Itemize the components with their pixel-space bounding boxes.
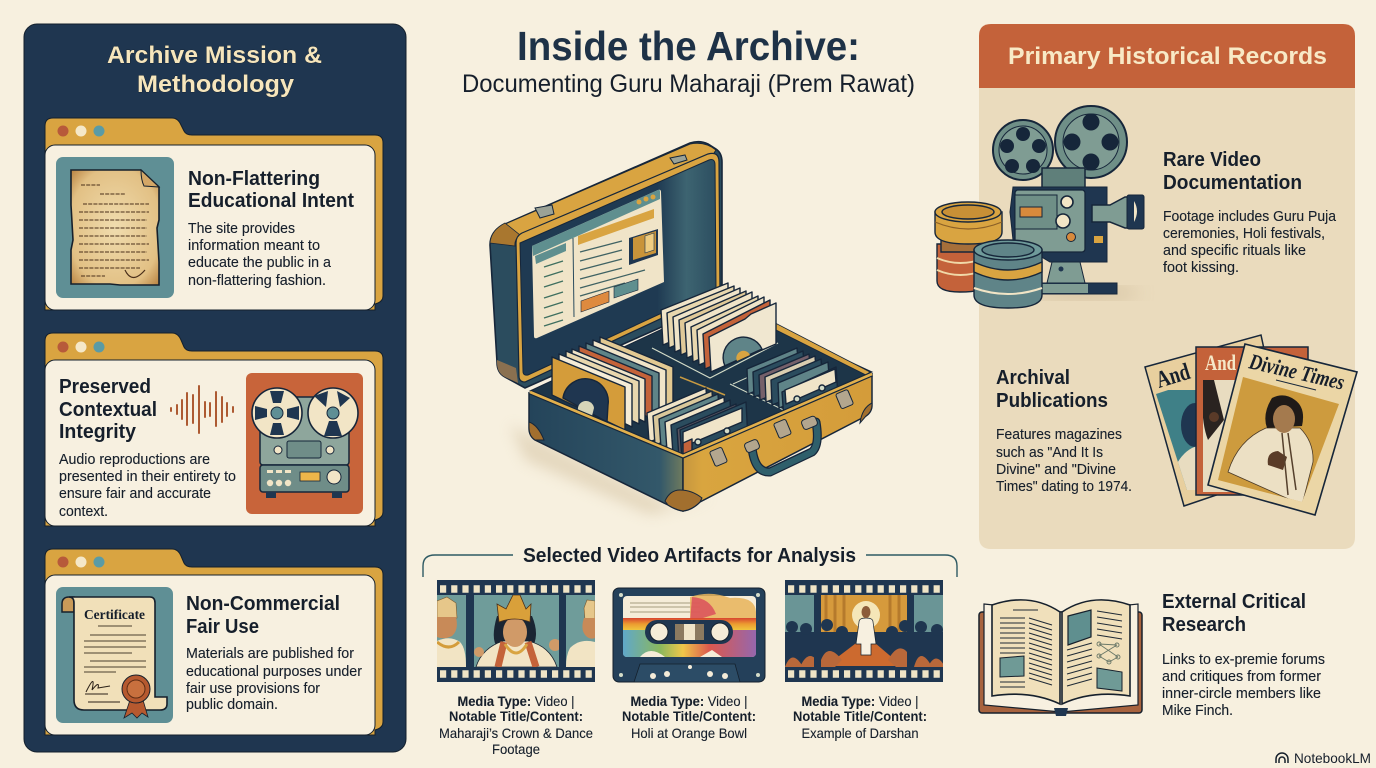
card heading: Fair Use [186, 615, 259, 638]
panel heading: Archive Mission & [107, 42, 322, 69]
caption: crown and dance footage [439, 693, 593, 757]
section: selected video artifacts [423, 544, 957, 757]
suitcase lid [490, 142, 722, 388]
card body text: fair use provisions for [186, 681, 320, 697]
magazine: and it is divine, back: And [1153, 359, 1194, 394]
caption: crown and dance footage: Media Type: Video | [458, 693, 574, 709]
magazine: divine times, front [1208, 344, 1357, 515]
card heading: Non-Commercial [186, 592, 340, 615]
text: rare video documentation: Documentation [1163, 171, 1302, 194]
card body text: The site provides [188, 221, 295, 237]
card body text [186, 646, 362, 713]
card heading [188, 167, 354, 212]
card heading [59, 375, 157, 443]
panel: primary historical records [935, 24, 1357, 549]
cassette: holi at orange bowl [613, 588, 765, 682]
stack of record sleeves: back compartment [661, 283, 776, 372]
text: archival publications: Features magazines [996, 427, 1122, 443]
card body text: non-flattering fashion. [188, 273, 326, 289]
text: rare video documentation: ceremonies, Holi festivals, [1163, 226, 1325, 242]
card body text: presented in their entirety to [59, 469, 236, 485]
subtitle: Documenting Guru Maharaji (Prem Rawat) [462, 70, 915, 98]
icon: open book [979, 600, 1142, 716]
card: non-flattering educational intent [45, 118, 383, 310]
text: external critical research: and critiques from former [1162, 669, 1321, 685]
card: preserved contextual integrity [45, 333, 383, 526]
icon: film projector and canisters [935, 106, 1144, 308]
icon: certificate scroll [56, 587, 173, 723]
panel heading: Methodology [137, 71, 294, 98]
card body text: ensure fair and accurate [59, 486, 211, 502]
text: rare video documentation: foot kissing. [1163, 260, 1239, 276]
caption: example of darshan [793, 693, 927, 741]
icon: reel to reel tape recorder [246, 373, 363, 514]
magazine: divine times, front: Divine Times [1246, 348, 1347, 395]
text: external critical research: inner-circle members like [1162, 686, 1321, 702]
card heading: Educational Intent [188, 189, 354, 212]
text: rare video documentation [1163, 148, 1337, 276]
card heading: Integrity [59, 420, 137, 443]
title: Inside the Archive: [517, 23, 860, 69]
caption: example of darshan: Media Type: Video | [802, 693, 918, 709]
card heading: Preserved [59, 375, 151, 398]
magazine: and it is divine, red [1196, 347, 1308, 495]
suitcase base [529, 374, 872, 511]
text: rare video documentation: and specific rituals like [1163, 243, 1306, 259]
text: external critical research: External Critical [1162, 590, 1306, 613]
text: external critical research: Mike Finch. [1162, 703, 1233, 719]
website screen inside lid [532, 190, 664, 338]
text: archival publications: Times" dating to 1974. [996, 479, 1132, 495]
film reels [993, 106, 1127, 180]
text: archival publications: Archival [996, 366, 1070, 389]
suitcase interior [530, 296, 872, 455]
card body text [188, 221, 332, 289]
text: external critical research: Links to ex-premie forums [1162, 652, 1325, 668]
card: non-commercial fair use [45, 549, 383, 735]
card heading: Contextual [59, 398, 157, 421]
caption: example of darshan: Example of Darshan [802, 725, 918, 741]
suitcase clasps and handle [709, 389, 854, 472]
text: archival publications: such as "And It Is [996, 445, 1103, 461]
icon: parchment document [56, 157, 174, 298]
caption: holi at orange bowl: Notable Title/Content: [622, 708, 756, 724]
projector body [1010, 168, 1144, 294]
stack of cassettes: right compartment [747, 348, 838, 420]
caption: holi at orange bowl: Media Type: Video | [630, 693, 748, 709]
film strip: example of darshan [785, 580, 945, 682]
watermark: notebooklm: NotebookLM [1294, 750, 1371, 766]
magazine: and it is divine, back [1144, 334, 1264, 507]
card body text: information meant to [188, 238, 320, 254]
text: archival publications: Divine" and "Divine [996, 462, 1116, 478]
card body text: educational purposes under [186, 664, 362, 680]
title [462, 23, 915, 98]
caption: example of darshan: Notable Title/Content: [793, 708, 927, 724]
card body text: Audio reproductions are [59, 452, 210, 468]
card body text: context. [59, 504, 108, 520]
text: external critical research: Research [1162, 613, 1246, 636]
card body text: public domain. [186, 697, 278, 713]
stack of record sleeves: left compartment [552, 337, 673, 430]
caption: crown and dance footage: Notable Title/Content: [449, 708, 583, 724]
icon: certificate scroll: Certificate [84, 607, 145, 622]
panel heading [979, 24, 1355, 88]
card heading [186, 592, 340, 638]
film strip: crown and dance footage [437, 580, 595, 682]
section heading: Selected Video Artifacts for Analysis [523, 544, 856, 567]
film canisters [935, 202, 1042, 308]
text: archival publications: Publications [996, 389, 1108, 412]
text: external critical research [1162, 590, 1325, 719]
panel heading [107, 42, 322, 98]
text: rare video documentation: Rare Video [1163, 148, 1261, 171]
card body text [59, 452, 236, 520]
caption: holi at orange bowl [622, 693, 756, 741]
text: rare video documentation: Footage includes Guru Puja [1163, 209, 1337, 225]
magazine: and it is divine, red: And [1205, 350, 1236, 375]
icon: audio waveform [171, 386, 233, 433]
card body text: Materials are published for [186, 646, 354, 662]
caption: crown and dance footage: Maharaji’s Crown & Dance [439, 725, 593, 741]
illustration: open archive suitcase [490, 142, 872, 515]
stack of cassettes: front compartment [647, 388, 748, 462]
card body text: educate the public in a [188, 255, 332, 271]
text: archival publications [996, 366, 1132, 495]
icon: stacked magazines [1145, 335, 1357, 515]
card heading: Non-Flattering [188, 167, 320, 190]
caption: crown and dance footage: Footage [492, 741, 540, 757]
panel heading: Primary Historical Records [1008, 43, 1327, 70]
caption: holi at orange bowl: Holi at Orange Bowl [631, 725, 747, 741]
